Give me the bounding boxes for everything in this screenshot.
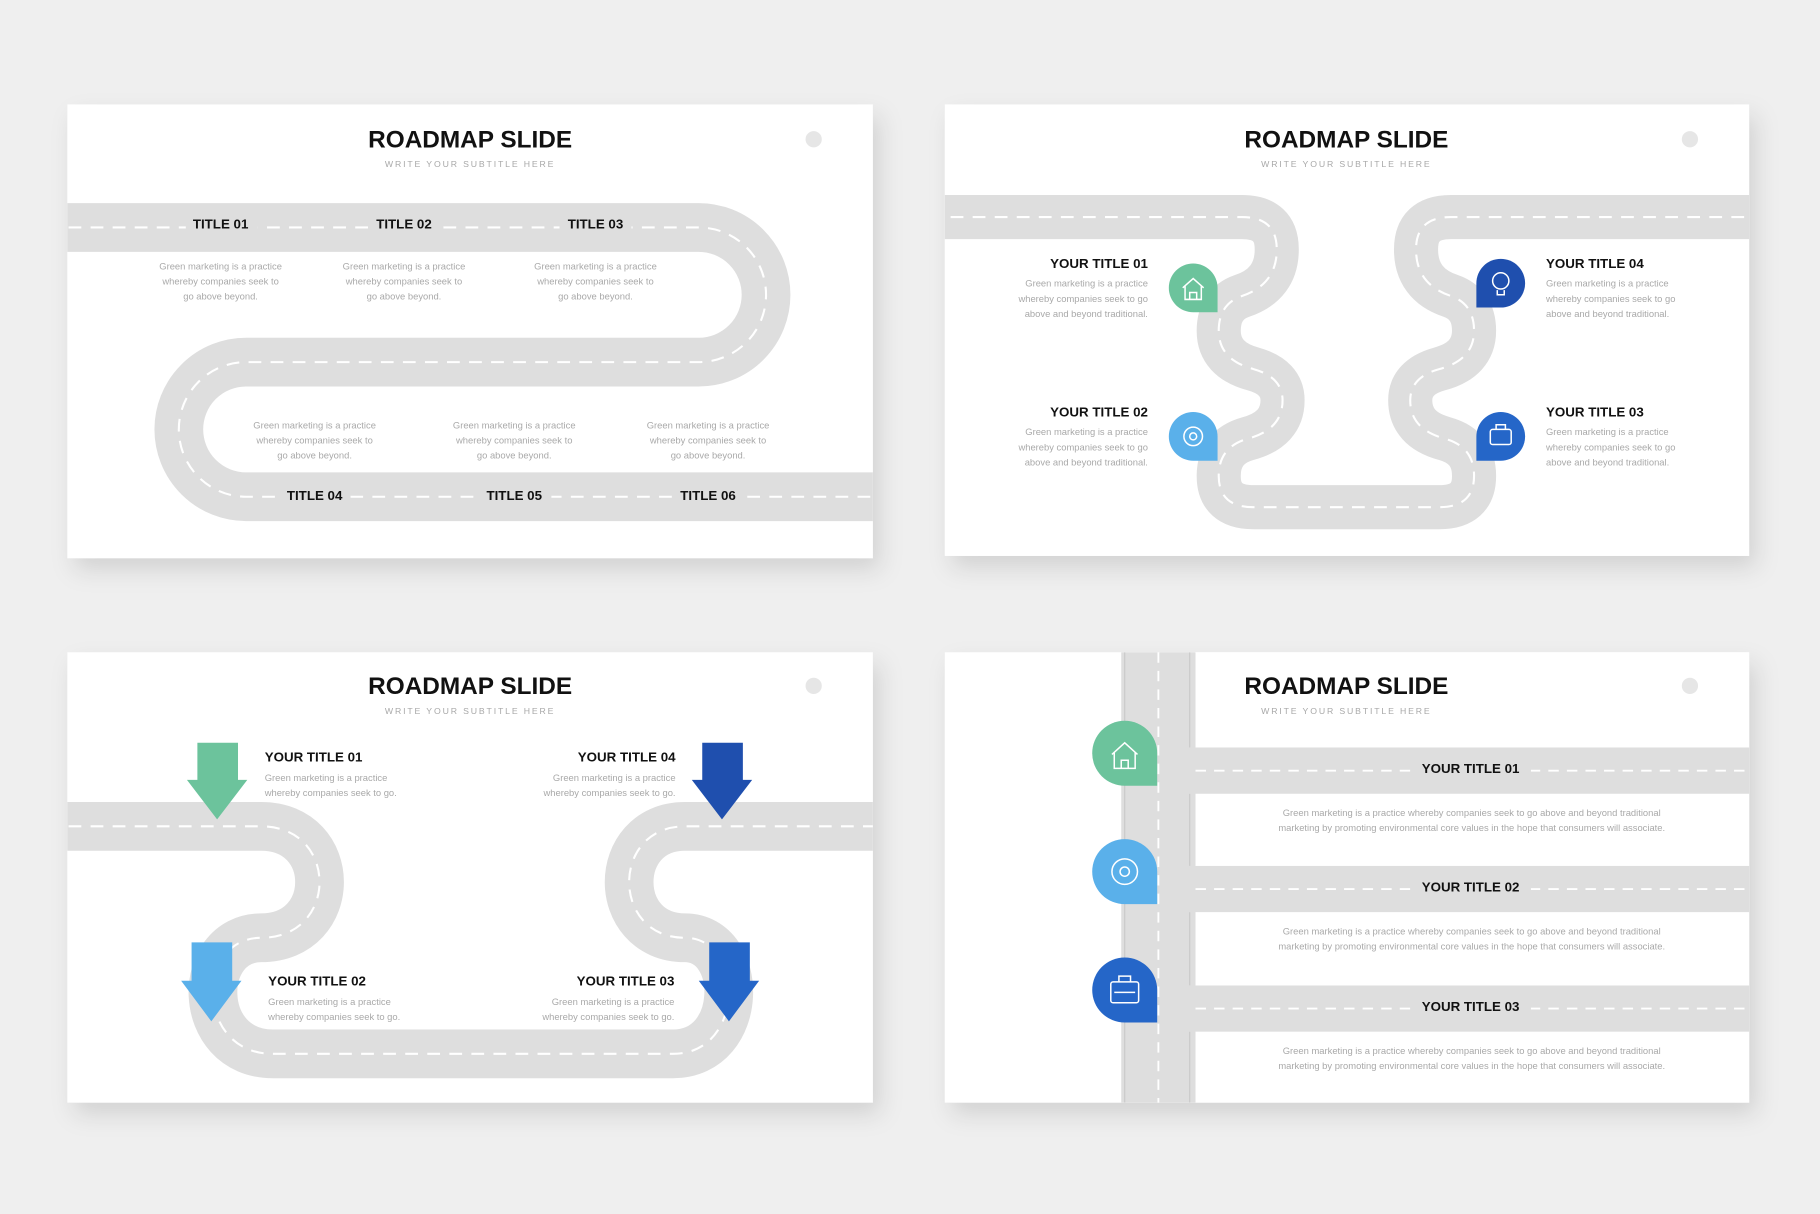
road titles: TITLE 06 xyxy=(680,488,736,503)
road xyxy=(929,217,1764,507)
body texts: Green marketing is a practice xyxy=(343,260,465,271)
text: your title 02: Green marketing is a practice xyxy=(268,996,391,1007)
text: your title 03 xyxy=(541,973,674,1022)
page number xyxy=(1682,131,1698,147)
text: your title 02 xyxy=(267,973,400,1022)
road title 02: YOUR TITLE 02 xyxy=(1422,879,1519,894)
text: your title 03 xyxy=(1545,405,1675,467)
road titles: TITLE 04 xyxy=(287,488,343,503)
body texts: go above beyond. xyxy=(558,290,633,301)
text: your title 01: above and beyond traditional. xyxy=(1025,308,1148,319)
text: your title 01 xyxy=(264,749,397,798)
text: your title 02: YOUR TITLE 02 xyxy=(268,973,366,988)
body texts: whereby companies seek to xyxy=(455,434,572,445)
body texts xyxy=(159,260,769,460)
body texts: marketing by promoting environmental core values in the hope that consumers will associate. xyxy=(1278,822,1665,833)
body texts: whereby companies seek to xyxy=(649,434,766,445)
text: your title 04 xyxy=(542,749,676,798)
text: your title 04: whereby companies seek to go xyxy=(1545,293,1675,304)
text: your title 03: Green marketing is a practice xyxy=(1546,426,1669,437)
text: your title 03: whereby companies seek to go. xyxy=(541,1011,674,1022)
body texts: go above beyond. xyxy=(477,449,552,460)
road title 01: YOUR TITLE 01 xyxy=(1422,761,1520,776)
icon: gear marker xyxy=(1092,839,1157,904)
text: your title 01 xyxy=(1017,256,1149,319)
subtitle: WRITE YOUR SUBTITLE HERE xyxy=(1261,159,1432,169)
text: your title 03: above and beyond traditional. xyxy=(1546,456,1669,467)
road title 01 xyxy=(1410,760,1531,781)
panel: slide 3 xyxy=(47,652,894,1103)
arrow: blue xyxy=(699,942,759,1021)
text: your title 03: Green marketing is a practice xyxy=(552,996,674,1007)
vertical road xyxy=(1121,652,1196,1103)
arrow: light blue xyxy=(181,942,241,1021)
body texts xyxy=(1278,807,1665,1071)
body texts: Green marketing is a practice xyxy=(159,260,282,271)
road titles: TITLE 03 xyxy=(568,217,623,232)
road titles: TITLE 05 xyxy=(486,488,543,503)
body texts: whereby companies seek to xyxy=(345,275,462,286)
text: your title 01: whereby companies seek to go xyxy=(1017,293,1148,304)
icon: house marker xyxy=(1092,721,1157,786)
text: your title 03: YOUR TITLE 03 xyxy=(1546,405,1644,420)
panel: slide 1 xyxy=(47,104,894,558)
text: your title 04: YOUR TITLE 04 xyxy=(578,749,676,764)
icon: briefcase marker xyxy=(1092,958,1157,1022)
page number xyxy=(806,678,822,694)
body texts: Green marketing is a practice whereby companies seek to go above and beyond traditional xyxy=(1283,925,1661,936)
text: your title 03: YOUR TITLE 03 xyxy=(577,973,674,988)
panel: slide 2 xyxy=(929,104,1764,556)
title: ROADMAP SLIDE xyxy=(1244,126,1448,153)
horizontal roads xyxy=(1161,747,1749,794)
road xyxy=(47,227,894,497)
title: ROADMAP SLIDE xyxy=(368,673,572,700)
body texts: whereby companies seek to xyxy=(255,434,373,445)
body texts: go above beyond. xyxy=(277,449,352,460)
body texts: marketing by promoting environmental core values in the hope that consumers will associate. xyxy=(1278,1060,1665,1071)
body texts: go above beyond. xyxy=(367,290,441,301)
page number xyxy=(1682,678,1698,694)
icon: house marker xyxy=(1169,263,1218,312)
subtitle: WRITE YOUR SUBTITLE HERE xyxy=(385,159,555,169)
icon: gear marker xyxy=(1169,412,1218,461)
text: your title 04 xyxy=(1545,256,1675,319)
body texts: whereby companies seek to xyxy=(161,275,279,286)
text: your title 02: Green marketing is a practice xyxy=(1025,426,1148,437)
arrow: green xyxy=(187,743,247,819)
road titles: TITLE 02 xyxy=(376,217,432,232)
text: your title 01: YOUR TITLE 01 xyxy=(1050,256,1149,271)
body texts: Green marketing is a practice xyxy=(453,419,576,430)
arrow: dark blue xyxy=(692,743,752,819)
text: your title 01: Green marketing is a practice xyxy=(265,772,387,783)
subtitle: WRITE YOUR SUBTITLE HERE xyxy=(385,706,555,716)
body texts: go above beyond. xyxy=(183,290,258,301)
text: your title 01: YOUR TITLE 01 xyxy=(265,749,363,764)
road title 03: YOUR TITLE 03 xyxy=(1422,999,1519,1014)
road xyxy=(47,826,894,1054)
text: your title 04: Green marketing is a practice xyxy=(1546,278,1669,289)
body texts: Green marketing is a practice xyxy=(534,260,657,271)
text: your title 04: YOUR TITLE 04 xyxy=(1546,256,1644,271)
road title 03 xyxy=(1410,998,1531,1019)
text: your title 02: YOUR TITLE 02 xyxy=(1050,405,1148,420)
page number xyxy=(806,131,822,147)
body texts: Green marketing is a practice xyxy=(647,419,769,430)
subtitle: WRITE YOUR SUBTITLE HERE xyxy=(1261,706,1432,716)
body texts: Green marketing is a practice xyxy=(253,419,376,430)
text: your title 01: Green marketing is a practice xyxy=(1025,278,1148,289)
icon: briefcase marker xyxy=(1476,412,1525,461)
text: your title 02: above and beyond traditional. xyxy=(1025,456,1148,467)
road titles: TITLE 01 xyxy=(193,217,249,232)
text: your title 04: whereby companies seek to go. xyxy=(542,787,676,798)
road titles xyxy=(186,216,745,506)
icon: bulb marker xyxy=(1476,259,1525,308)
text: your title 04: above and beyond traditional. xyxy=(1546,308,1669,319)
body texts: Green marketing is a practice whereby companies seek to go above and beyond traditional xyxy=(1283,807,1661,818)
panel: slide 4 xyxy=(945,652,1749,1103)
body texts: marketing by promoting environmental core values in the hope that consumers will associate. xyxy=(1278,940,1665,951)
road title 02 xyxy=(1410,879,1531,899)
body texts: Green marketing is a practice whereby companies seek to go above and beyond traditional xyxy=(1283,1045,1661,1056)
title: ROADMAP SLIDE xyxy=(368,126,572,153)
text: your title 03: whereby companies seek to go xyxy=(1545,441,1675,452)
body texts: whereby companies seek to xyxy=(536,275,654,286)
text: your title 02 xyxy=(1017,405,1148,467)
text: your title 04: Green marketing is a practice xyxy=(553,772,676,783)
body texts: go above beyond. xyxy=(671,449,745,460)
text: your title 02: whereby companies seek to go. xyxy=(267,1011,400,1022)
title: ROADMAP SLIDE xyxy=(1244,673,1448,700)
text: your title 01: whereby companies seek to go. xyxy=(264,787,397,798)
white cards xyxy=(1196,652,1749,747)
text: your title 02: whereby companies seek to go xyxy=(1017,441,1148,452)
